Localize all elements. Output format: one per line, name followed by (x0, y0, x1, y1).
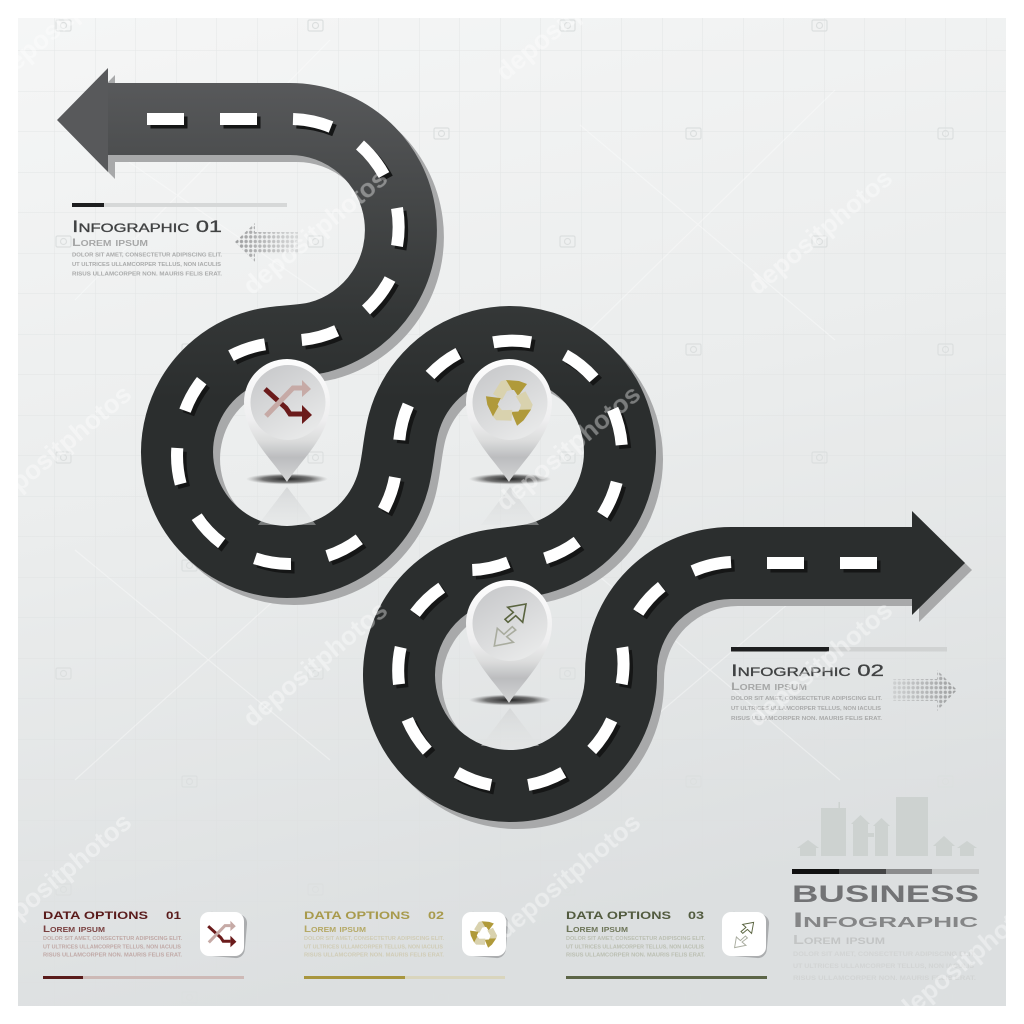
text block: Infographic 02: DOLOR SIT AMET, CONSECTETUR ADIPISCING ELIT. (731, 696, 883, 702)
panel: data options 03: RISUS ULLAMCORPER NON. MAURIS FELIS ERAT. (566, 952, 706, 958)
panel: data options 02: RISUS ULLAMCORPER NON. MAURIS FELIS ERAT. (304, 952, 445, 958)
watermarks: depositphotos (490, 378, 646, 517)
panel: data options 01: Lorem ipsum (43, 924, 105, 935)
icon: halftone left arrow (235, 223, 298, 262)
text block: Infographic 02: UT ULTRICES ULLAMCORPER TELLUS, NON IACULIS (731, 706, 881, 712)
panel: data options 01: DATA OPTIONS (43, 910, 148, 922)
title: Business Infographic: Infographic (793, 909, 978, 932)
text block: Infographic 01: DOLOR SIT AMET, CONSECTETUR ADIPISCING ELIT. (72, 252, 223, 258)
text block: Infographic 01: Lorem ipsum (72, 237, 148, 249)
icon: recycle (482, 380, 538, 428)
panel: data options 03: DOLOR SIT AMET, CONSECTETUR ADIPISCING ELIT. (566, 936, 706, 942)
panel: data options 03 (566, 910, 770, 979)
card icon: diagonal arrows (722, 911, 770, 959)
title: Business Infographic: UT ULTRICES ULLAMCORPER TELLUS, NON IACULIS (793, 963, 975, 970)
watermarks: depositphotos (742, 162, 898, 301)
panel: data options 02: UT ULTRICES ULLAMCORPER TELLUS, NON IACULIS (304, 944, 444, 950)
panel: data options 02: DOLOR SIT AMET, CONSECTETUR ADIPISCING ELIT. (304, 936, 445, 942)
left arrow head (57, 68, 108, 172)
title: Business Infographic: RISUS ULLAMCORPER NON. MAURIS FELIS ERAT. (793, 975, 976, 982)
road dash shadows (150, 122, 880, 788)
icon: two diagonal arrows (494, 604, 526, 646)
title: Business Infographic: Lorem ipsum (793, 932, 885, 947)
text block: Infographic 02 (731, 647, 947, 722)
panel: data options 01: 01 (166, 910, 181, 922)
map pin 3: diagonal arrows (466, 580, 552, 746)
road dashes (147, 119, 877, 785)
text block: Infographic 01: UT ULTRICES ULLAMCORPER TELLUS, NON IACULIS (72, 262, 221, 268)
watermarks: depositphotos (742, 594, 898, 733)
panel: data options 01 (43, 910, 248, 979)
title: Business Infographic: BUSINESS (792, 881, 979, 908)
panel: data options 01: UT ULTRICES ULLAMCORPER TELLUS, NON IACULIS (43, 944, 182, 950)
panel: data options 03: DATA OPTIONS (566, 910, 671, 922)
panel: data options 02 (304, 910, 509, 979)
panel: data options 03: Lorem ipsum (566, 924, 628, 935)
panel: data options 01: RISUS ULLAMCORPER NON. MAURIS FELIS ERAT. (43, 952, 183, 958)
card icon: shuffle (200, 911, 248, 959)
text block: Infographic 02: Infographic 02 (731, 661, 884, 680)
text block: Infographic 01: RISUS ULLAMCORPER NON. MAURIS FELIS ERAT. (72, 272, 223, 278)
road shadow (64, 75, 972, 793)
title: Business Infographic (792, 869, 979, 982)
icon: shuffle arrows (265, 380, 312, 424)
watermarks: depositphotos (237, 594, 393, 733)
text block: Infographic 02: RISUS ULLAMCORPER NON. MAURIS FELIS ERAT. (731, 716, 883, 722)
map pin 2: recycle (466, 359, 552, 525)
panel: data options 02: 02 (428, 910, 444, 922)
panel: data options 02: DATA OPTIONS (304, 910, 410, 922)
panel: data options 03: UT ULTRICES ULLAMCORPER TELLUS, NON IACULIS (566, 944, 705, 950)
text block: Infographic 01 (72, 203, 287, 278)
title: Business Infographic: DOLOR SIT AMET, CONSECTETUR ADIPISCING ELIT. (793, 951, 976, 958)
watermarks: depositphotos (490, 806, 646, 945)
panel: data options 01: DOLOR SIT AMET, CONSECTETUR ADIPISCING ELIT. (43, 936, 183, 942)
text block: Infographic 01: Infographic 01 (72, 217, 222, 236)
winding road with arrow ends (57, 68, 965, 786)
text block: Infographic 02: Lorem ipsum (731, 681, 807, 693)
map pin 1: shuffle (244, 359, 330, 525)
icon: city skyline (797, 797, 977, 856)
right arrow head (912, 511, 965, 615)
card icon: recycle (461, 911, 509, 959)
icon: halftone right arrow (893, 670, 957, 711)
watermarks: depositphotos (237, 162, 393, 301)
panel: data options 03: 03 (688, 910, 704, 922)
panel: data options 02: Lorem ipsum (304, 924, 366, 935)
